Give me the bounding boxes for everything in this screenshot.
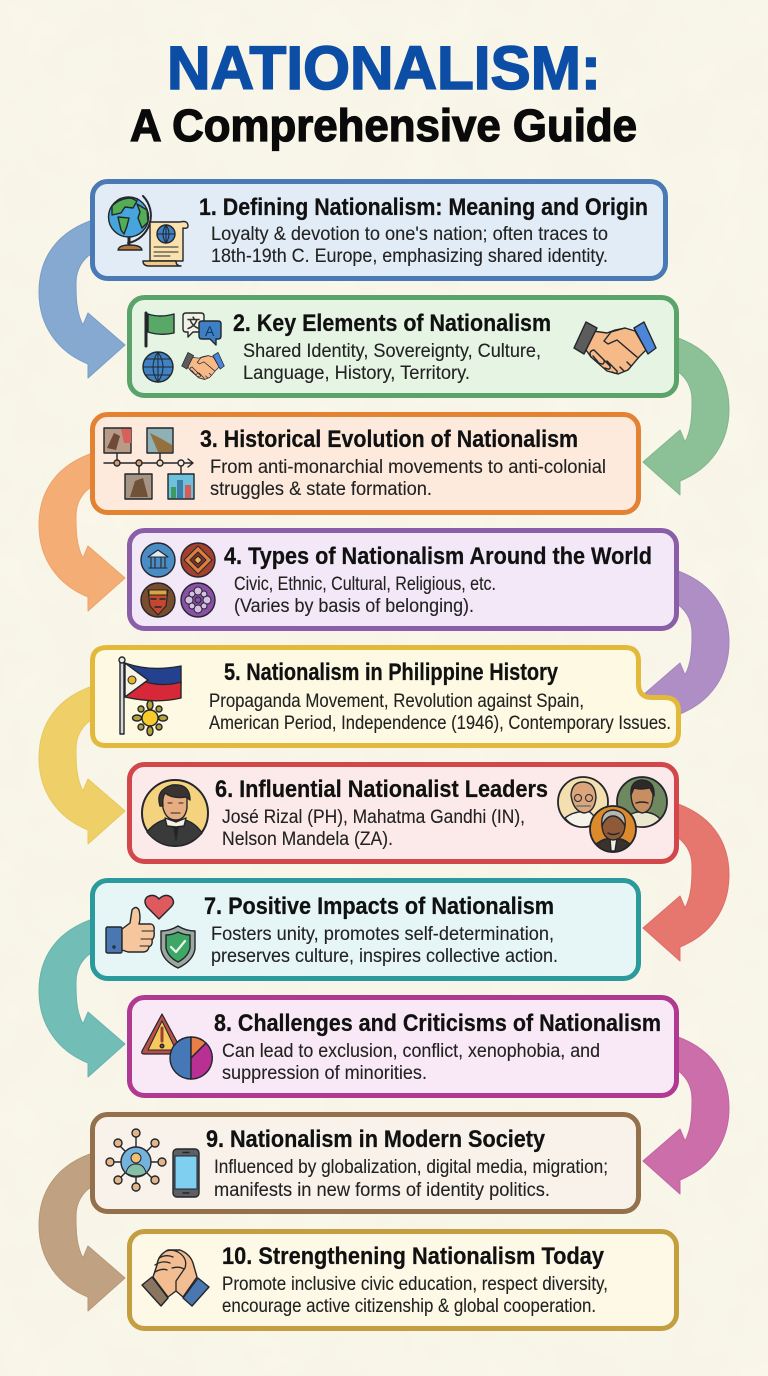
panel: 9 modern society [92, 1114, 638, 1212]
text block [211, 224, 608, 267]
heading: 6. Influential Nationalist Leaders [215, 776, 548, 803]
text block: suppression of minorities. [222, 1063, 427, 1084]
text block: encourage active citizenship & global cooperation. [222, 1296, 596, 1317]
icon: warning triangle and pie chart [142, 1014, 212, 1079]
arrow: 7 to 8 [39, 918, 125, 1077]
text block: Language, History, Territory. [243, 363, 470, 384]
text block: Loyalty & devotion to one's nation; often traces to [211, 224, 608, 245]
icon: four type badges [141, 543, 215, 617]
panel: 4 types of nationalism [130, 530, 676, 628]
heading: 4. Types of Nationalism Around the World [224, 543, 652, 570]
arrow: 2 to 3 [643, 336, 729, 495]
arrow: 5 to 6 [39, 685, 125, 844]
panel: 5 philippine history [92, 648, 678, 746]
arrow: 9 to 10 [39, 1152, 125, 1311]
arrow: 1 to 2 [39, 219, 125, 378]
text block: José Rizal (PH), Mahatma Gandhi (IN), [222, 807, 525, 828]
panel: 7 positive impacts [92, 880, 638, 978]
panel: 3 historical evolution [92, 414, 638, 512]
text block: Nelson Mandela (ZA). [222, 829, 393, 850]
panel: 1 defining nationalism [92, 182, 666, 278]
icon: handshake [574, 322, 656, 374]
heading: 1. Defining Nationalism: Meaning and Origin [199, 194, 648, 221]
text block [222, 1041, 600, 1084]
icon: flag, speech bubbles, globe, handshake: A [205, 323, 215, 339]
icon: portrait of Rizal [142, 780, 208, 846]
heading: 2. Key Elements of Nationalism [233, 310, 551, 337]
text block [211, 924, 558, 967]
panel: 2 key elements [130, 298, 676, 396]
arrow: 4 to 5 [643, 569, 729, 728]
text block: Can lead to exclusion, conflict, xenophobia, and [222, 1041, 600, 1062]
text block: Propaganda Movement, Revolution against Spain, [209, 691, 584, 712]
icon: clasped hands [142, 1250, 209, 1306]
arrow: 8 to 9 [643, 1035, 729, 1194]
text block: 18th-19th C. Europe, emphasizing shared identity. [211, 246, 608, 267]
text block [234, 574, 496, 617]
panel: 10 strengthening nationalism [130, 1232, 676, 1328]
arrow: 3 to 4 [39, 452, 125, 611]
icon: globe and scroll [108, 196, 188, 266]
text block [222, 807, 525, 850]
heading: 10. Strengthening Nationalism Today [222, 1243, 605, 1270]
text block: Promote inclusive civic education, respect diversity, [222, 1274, 608, 1295]
panel: 8 challenges and criticisms [130, 998, 676, 1096]
heading: 9. Nationalism in Modern Society [206, 1126, 546, 1153]
heading: 8. Challenges and Criticisms of Nationalism [214, 1010, 661, 1037]
text block: From anti-monarchial movements to anti-colonial [210, 457, 606, 478]
heading: 3. Historical Evolution of Nationalism [200, 426, 578, 453]
icon: thumbs up, heart, shield [106, 895, 195, 968]
text block: preserves culture, inspires collective action. [211, 946, 558, 967]
text block [209, 691, 671, 734]
text block: Civic, Ethnic, Cultural, Religious, etc. [234, 574, 496, 595]
panel: 6 influential leaders [130, 764, 676, 862]
heading: 7. Positive Impacts of Nationalism [204, 893, 554, 920]
text block: (Varies by basis of belonging). [234, 596, 474, 617]
title [130, 34, 637, 151]
arrow: 6 to 7 [643, 802, 729, 961]
title: NATIONALISM: [167, 34, 601, 102]
text block [210, 457, 606, 500]
text block [243, 341, 541, 384]
icon: philippine flag and sun [119, 657, 181, 736]
text block: Fosters unity, promotes self-determination, [211, 924, 554, 945]
text block [214, 1157, 608, 1201]
text block [222, 1274, 608, 1317]
icon: social network and phone [106, 1129, 199, 1197]
icon: flag, speech bubbles, globe, handshake [143, 313, 224, 382]
icon: timeline with pictures [104, 428, 194, 499]
icon: flag, speech bubbles, globe, handshake: 文 [187, 316, 201, 331]
title: A Comprehensive Guide [130, 100, 637, 151]
text block: American Period, Independence (1946), Contemporary Issues. [209, 713, 671, 734]
text block: Influenced by globalization, digital media, migration; [214, 1157, 608, 1178]
text block: Shared Identity, Sovereignty, Culture, [243, 341, 541, 362]
icon: portraits of Gandhi, Mandela and another leader [558, 777, 667, 852]
text block: manifests in new forms of identity politics. [214, 1180, 550, 1201]
text block: struggles & state formation. [210, 479, 432, 500]
heading: 5. Nationalism in Philippine History [224, 659, 559, 686]
